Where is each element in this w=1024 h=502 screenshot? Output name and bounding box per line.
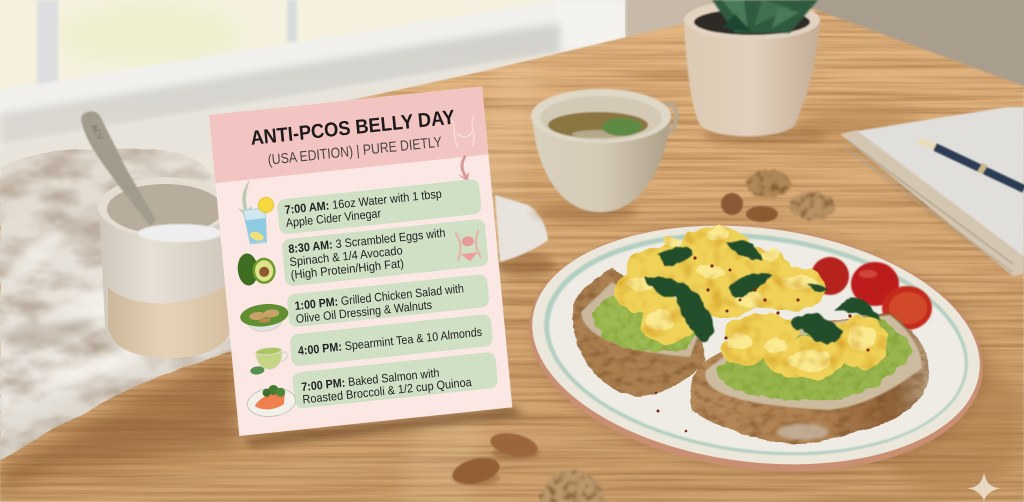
avocado toast right: [690, 313, 929, 444]
card header band: [209, 86, 488, 183]
spoon: ACV: [89, 123, 105, 142]
spinach leaves: [645, 241, 880, 343]
icon: salmon plate: [246, 383, 297, 419]
icon: waist: [455, 230, 481, 263]
icon: avocado: [236, 251, 277, 287]
card shadow: [242, 406, 524, 448]
meal row: 7:00 PM: 7:00 PM: Baked Salmon with: [301, 366, 440, 394]
spoon: [81, 111, 156, 226]
arrow: green down: [236, 181, 253, 221]
arrow: pink down: [455, 155, 470, 183]
succulent: [712, 0, 818, 33]
icon: body sketch: [452, 115, 476, 148]
plate: [515, 200, 997, 496]
chili flakes and seeds: [655, 256, 870, 432]
folded towel: [0, 149, 232, 460]
meal row: 7:00 PM: [292, 352, 498, 409]
meal row: 8:30 AM: [281, 218, 489, 287]
table shadow behind towel and card: [0, 352, 240, 492]
icon: salad bowl: [239, 302, 290, 334]
meal row: 7:00 AM: 7:00 AM: 16oz Water with 1 tbsp: [284, 187, 443, 217]
window frame: [0, 0, 625, 152]
towel corner behind card: [495, 195, 555, 277]
potted plant: [684, 0, 827, 146]
title: ANTI-PCOS BELLY DAY: [250, 107, 456, 150]
meal row: 1:00 PM: 1:00 PM: Grilled Chicken Salad with: [294, 281, 464, 313]
teacup: [531, 89, 677, 222]
subtitle: (USA EDITION) | PURE DIETLY: [267, 135, 443, 169]
ceramic mug with spoon: [81, 111, 232, 358]
icon: green tea cup: [248, 346, 289, 375]
scrambled eggs: [614, 227, 888, 379]
meal row: 1:00 PM: [287, 274, 490, 328]
meal row: 1:00 PM: Olive Oil Dressing & Walnuts: [295, 298, 433, 326]
meal row: 8:30 AM: Spinach & 1/4 Avocado: [289, 243, 403, 269]
notebook and pen: [840, 107, 1024, 276]
meal row: 7:00 AM: [277, 179, 482, 235]
almonds and walnut on table: [450, 429, 605, 502]
nuts near teacup: [721, 170, 835, 222]
sparkle watermark: [967, 472, 1001, 501]
window sill: [0, 24, 560, 185]
cherry tomatoes: [811, 257, 932, 330]
meal row: 8:30 AM: 8:30 AM: 3 Scrambled Eggs with: [288, 226, 446, 256]
meal row: 8:30 AM: (High Protein/High Fat): [290, 256, 404, 282]
icon: lemon water glass: [242, 197, 277, 244]
diet plan card: [209, 86, 512, 436]
meal row: 7:00 PM: Roasted Broccoli & 1/2 cup Quinoa: [302, 375, 472, 407]
meal row: 7:00 AM: Apple Cider Vinegar: [285, 206, 382, 230]
pen: [921, 141, 1024, 189]
avocado toast left: [573, 268, 705, 397]
meal row: 4:00 PM: 4:00 PM: Spearmint Tea & 10 Almonds: [297, 325, 483, 358]
meal row: 4:00 PM: [289, 314, 493, 367]
